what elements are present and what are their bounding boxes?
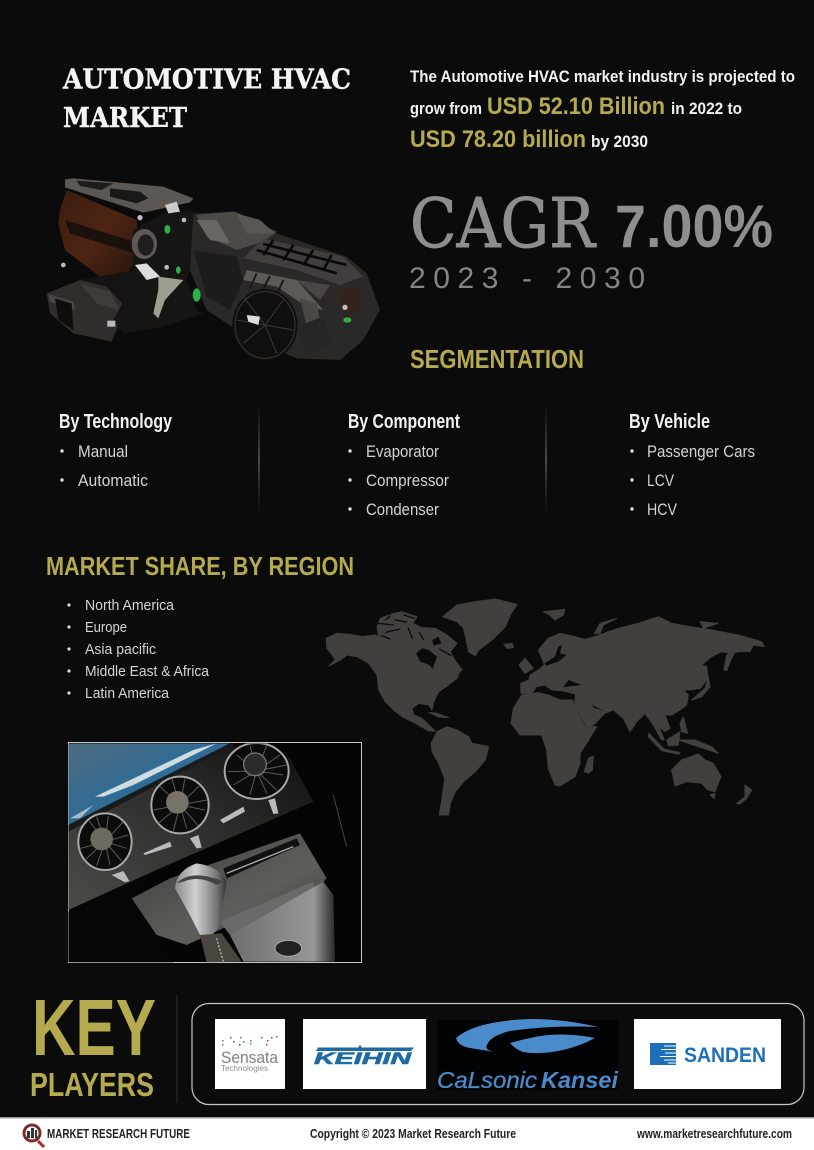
logo: Calsonic Kansei: CaLsonic	[437, 1067, 538, 1093]
market growth statement: in 2022 to	[671, 99, 742, 118]
segment: by vehicle	[629, 411, 755, 519]
heading: key players: PLAYERS	[30, 1066, 154, 1103]
region list	[67, 597, 210, 702]
segment: by vehicle: HCV	[647, 500, 678, 519]
logo: Calsonic Kansei	[437, 1019, 619, 1093]
title	[62, 64, 351, 134]
heading: segmentation: SEGMENTATION	[410, 344, 584, 374]
image: HVAC unit	[47, 178, 380, 361]
heading: key players	[30, 983, 156, 1103]
segment: by component: Condenser	[366, 500, 439, 519]
footer: Copyright © 2023 Market Research Future	[310, 1127, 516, 1141]
title: MARKET	[63, 103, 187, 134]
title: AUTOMOTIVE HVAC	[62, 64, 351, 96]
segment: by component	[348, 411, 460, 519]
segment: by component: By Component	[348, 411, 460, 433]
logo: Sensata: Technologies	[221, 1063, 268, 1073]
key players panel	[192, 1004, 804, 1104]
footer	[0, 1117, 814, 1150]
logo: Calsonic Kansei: Kansei	[541, 1067, 619, 1093]
segment: by component: Evaporator	[366, 442, 439, 461]
segment: by technology: By Technology	[59, 411, 173, 433]
market growth statement	[410, 67, 795, 153]
photo: car dashboard vents	[68, 742, 362, 962]
world map	[326, 599, 764, 815]
logo: Sensata	[215, 1019, 285, 1089]
logo: Sanden: SANDEN	[684, 1044, 766, 1067]
region list: Europe	[85, 619, 127, 636]
segment: by vehicle: By Vehicle	[629, 411, 710, 433]
logo: Keihin	[303, 1019, 426, 1089]
segment: by vehicle: LCV	[647, 471, 675, 490]
CAGR figure	[409, 185, 773, 295]
segment: by technology: Manual	[78, 442, 128, 461]
market growth statement: by 2030	[591, 132, 648, 151]
segment: by technology	[59, 411, 173, 490]
market growth statement: grow from	[410, 99, 482, 118]
heading: key players: KEY	[32, 983, 156, 1072]
logo: Market Research Future icon	[22, 1124, 44, 1147]
logo: Sanden	[634, 1019, 781, 1089]
heading: market share by region: MARKET SHARE, BY REGION	[46, 551, 354, 581]
segment: by vehicle: Passenger Cars	[647, 442, 755, 461]
segment: by technology: Automatic	[78, 471, 148, 490]
segment: by component: Compressor	[366, 471, 449, 490]
logo: Sensata: Sensata	[221, 1048, 278, 1067]
region list: Latin America	[85, 685, 170, 702]
region list: Asia pacific	[85, 641, 156, 658]
footer: MARKET RESEARCH FUTURE	[47, 1126, 190, 1141]
CAGR figure: CAGR	[410, 185, 597, 264]
CAGR figure: 7.00%	[615, 193, 773, 260]
market growth statement: USD 52.10 Billion	[487, 93, 665, 120]
logo: Keihin: KEIHIN	[314, 1049, 412, 1068]
market growth statement: USD 78.20 billion	[410, 126, 586, 153]
region list: Middle East & Africa	[85, 663, 210, 680]
region list: North America	[85, 597, 175, 614]
CAGR figure: 2023 - 2030	[409, 262, 645, 295]
